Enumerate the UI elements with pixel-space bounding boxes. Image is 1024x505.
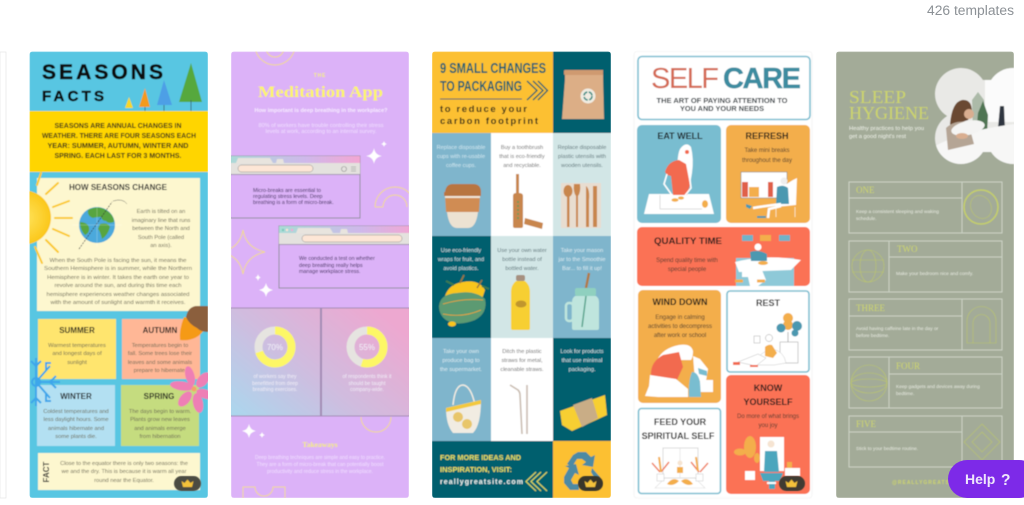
step two	[849, 241, 1002, 292]
icon: premium crown badge	[174, 476, 201, 491]
footer cta	[432, 441, 553, 498]
subtitle	[849, 126, 924, 140]
summer card: and longest days of	[52, 351, 102, 357]
icon: bamboo toothbrush	[513, 174, 543, 229]
step five: Stick to your bedtime routine.	[856, 446, 918, 452]
tile row one: coffee cups.	[446, 163, 476, 169]
self care title: YOU AND YOUR NEEDS	[680, 106, 764, 113]
stats band	[225, 308, 415, 416]
tile row three: packaging.	[568, 367, 596, 373]
intro band	[30, 111, 208, 172]
help button	[948, 460, 1024, 498]
tile row one: cups with re-usable	[437, 154, 485, 160]
help button: ?	[1001, 472, 1010, 489]
quality time card: special people	[668, 267, 707, 273]
takeaways: Takeaways	[302, 440, 338, 449]
icon: reusable cup	[444, 184, 481, 228]
rest card: REST	[756, 298, 780, 308]
summer card: sunlight	[67, 360, 87, 366]
spring card: SPRING	[144, 392, 174, 401]
fact box	[38, 453, 200, 490]
tile row two: Use your own water	[497, 248, 547, 254]
winter card: less daylight hours. Some	[43, 417, 109, 423]
tile row three: Look for products	[560, 349, 604, 355]
lower arc	[361, 417, 391, 432]
fact box: Close to the equator there is only two seasons: the	[60, 461, 188, 467]
spring card: and animals emerge	[134, 426, 186, 432]
meditation heading	[254, 73, 388, 135]
panel: seasons facts	[30, 52, 208, 498]
icon: wrapped fruit	[439, 275, 489, 326]
tile row three: the supermarket.	[440, 367, 482, 373]
tile row two: Use eco-friendly	[441, 248, 481, 254]
tile row three: cleanable straws.	[500, 367, 544, 373]
browser window one	[225, 156, 360, 218]
packaging header: TO PACKAGING	[440, 79, 522, 95]
know yourself card: KNOW	[754, 383, 783, 393]
takeaways: Deep breathing techniques are simple and easy to practice.	[255, 455, 385, 461]
feed your spiritual self card: SPIRITUAL SELF	[642, 431, 715, 441]
how seasons change box: Southern Hemisphere is in summer, while the Northern	[44, 266, 192, 272]
how seasons change box: revolve around the sun, and during this time each	[54, 283, 182, 289]
rest card	[727, 291, 809, 372]
sleep hygiene title: HYGIENE	[849, 103, 929, 123]
tile row two	[432, 236, 611, 338]
subtitle: Healthy practices to help you	[849, 126, 924, 132]
subtitle: get a good night's rest	[849, 134, 907, 140]
eat well card	[637, 125, 721, 223]
stat captions: of workers say they	[253, 374, 297, 380]
template count: 426 templates	[927, 3, 1014, 18]
recycle tile	[553, 441, 611, 498]
browser window two: manage workplace stress.	[299, 269, 361, 275]
icon: premium crown badge	[779, 476, 805, 491]
stat captions: breathing exercises.	[253, 387, 297, 393]
self care title	[638, 56, 810, 120]
know yourself card: Do more of what brings	[737, 414, 799, 420]
panel: packaging	[432, 52, 611, 498]
autumn card: prepare to hibernate.	[134, 368, 187, 374]
panel: self care	[634, 52, 812, 498]
sleep hygiene title: SLEEP	[849, 87, 906, 107]
fact box: we and the dry. This is because it is warm all year	[61, 469, 187, 475]
intro band: SPRING. EACH LAST FOR 3 MONTHS.	[54, 151, 182, 160]
spring card	[121, 385, 199, 446]
icon: yellow bottle	[511, 275, 530, 330]
how seasons change box: Earth is tilted on an	[137, 209, 185, 215]
tile row one: and recyclable.	[503, 163, 541, 169]
how seasons change box: HOW SEASONS CHANGE	[69, 182, 167, 192]
feed your spiritual self card	[638, 408, 720, 494]
takeaways: They are a form of micro-break that can potentially boost	[256, 462, 384, 468]
help button: Help	[965, 471, 995, 487]
winter card: Coldest temperatures and	[43, 409, 109, 415]
meditation heading: THE	[314, 73, 326, 79]
summer card	[38, 319, 116, 379]
tile row three: straws for metal,	[501, 358, 543, 364]
footer cta: FOR MORE IDEAS AND	[440, 453, 522, 462]
step three: Avoid having caffeine late in the day or	[856, 326, 939, 332]
know yourself card: you joy	[758, 423, 778, 429]
wind down card: WIND DOWN	[652, 297, 708, 307]
step five: FIVE	[856, 419, 877, 429]
self care title: SELF	[651, 63, 719, 95]
donut chart 70%	[258, 330, 292, 364]
handle: @REALLYGREATSITE	[892, 480, 961, 486]
step four: bedtime.	[896, 391, 914, 397]
tile row one	[432, 133, 611, 236]
refresh card	[726, 125, 810, 223]
footer cta: reallygreatsite.com	[440, 479, 523, 486]
know yourself card	[726, 375, 810, 494]
step five	[849, 416, 1002, 467]
icon: soap bar	[560, 395, 607, 431]
tile row two: bottle instead of	[502, 257, 542, 263]
browser window two: deep breathing really helps	[299, 263, 363, 269]
photo: woman in bed	[930, 60, 1020, 170]
packaging header	[432, 52, 553, 134]
how seasons change box: South Pole (called	[138, 235, 184, 241]
tile row two: bottled water.	[505, 266, 539, 272]
stat captions: company-wide.	[350, 387, 384, 393]
wind down card	[638, 290, 721, 403]
self care title: CARE	[723, 63, 801, 95]
previous card edge	[0, 52, 6, 498]
donut chart 70%: 70%	[267, 343, 283, 352]
winter card	[37, 385, 115, 446]
tile row three: that use minimal	[562, 358, 602, 364]
meditation heading: How important is deep breathing in the workplace?	[254, 108, 388, 114]
fact box: round near the Equator.	[94, 478, 154, 484]
icon: wooden utensils	[561, 183, 601, 228]
step one: schedule.	[856, 216, 877, 222]
tile row one: Replace disposable	[437, 145, 485, 151]
step four: Keep gadgets and devices away during	[896, 384, 980, 390]
feed your spiritual self card: FEED YOUR	[654, 417, 707, 427]
winter card: WINTER	[60, 392, 92, 401]
decorative rings	[255, 52, 295, 66]
packaging header: carbon footprint	[440, 116, 539, 127]
refresh card: REFRESH	[745, 131, 789, 141]
tile row two: Take your mason	[561, 248, 603, 254]
autumn card: leaves and some animals	[128, 360, 192, 366]
icon: mason jar	[566, 273, 599, 330]
how seasons change box: between the North and	[132, 226, 190, 232]
takeaways	[255, 440, 385, 475]
icon: trees	[125, 63, 202, 111]
refresh card: throughout the day	[742, 158, 792, 164]
step two: Make your bedroom nice and comfy.	[896, 271, 973, 277]
fact box: FACT	[42, 461, 51, 482]
step one: Keep a consistent sleeping and waking	[856, 209, 939, 215]
panel: meditation app	[231, 52, 409, 498]
tile row three	[432, 338, 611, 441]
intro band: YEAR: SUMMER, AUTUMN, WINTER AND	[48, 141, 189, 150]
takeaways: productivity and reduce stress in the workplace.	[267, 469, 373, 475]
step three	[849, 299, 1002, 350]
how seasons change box: When the South Pole is facing the sun, it means the	[50, 258, 186, 264]
bottom u-shape	[243, 487, 285, 500]
browser window one: regulating stress levels. Deep	[253, 194, 323, 200]
tile row two: avoid plastics.	[443, 266, 479, 272]
sparkles middle	[255, 274, 273, 297]
browser window one: breathing is a form of micro-break.	[253, 200, 334, 206]
how seasons change box: imaginary line that runs	[132, 218, 191, 224]
stat captions: benefitted from deep	[252, 381, 298, 387]
tile row one: wooden utensils.	[560, 163, 603, 169]
tile row three: Take your own	[443, 349, 479, 355]
how seasons change box: hemisphere experiences weather changes associated	[46, 292, 190, 298]
spring card: from hibernation	[139, 434, 181, 440]
autumn card: fall. Some trees lose their	[128, 351, 192, 357]
donut chart 55%: 55%	[359, 343, 375, 352]
winter card: animals hibernate and	[48, 426, 104, 432]
tile row one: Buy a toothbrush	[501, 145, 543, 151]
step four: FOUR	[896, 361, 920, 371]
browser window two	[279, 226, 415, 288]
paper bag tile	[553, 52, 611, 134]
wind down card: Engage in calming	[655, 315, 705, 321]
how seasons change box	[37, 178, 200, 311]
icon: acorn	[180, 306, 208, 340]
meditation heading: Meditation App	[258, 84, 383, 101]
step one	[849, 182, 1002, 233]
icon: sun	[30, 171, 74, 264]
stat captions: should be taught	[349, 381, 386, 387]
tile row one: Replace disposable	[558, 145, 606, 151]
tile row one: that is eco-friendly	[499, 154, 545, 160]
browser window one: Micro-breaks are essential to	[253, 188, 321, 194]
tile row two: Bar... to fill it up!	[562, 266, 602, 272]
icon: premium crown badge	[578, 476, 603, 491]
step three: before bedtime.	[856, 333, 889, 339]
autumn card: AUTUMN	[143, 326, 178, 335]
how seasons change box: an axis).	[150, 243, 172, 249]
packaging header: 9 SMALL CHANGES	[440, 61, 546, 77]
tile row two: wraps for fruit, and	[437, 257, 484, 263]
eat well card: EAT WELL	[657, 131, 703, 141]
stat captions: of respondents think it	[343, 374, 392, 380]
packaging header: to reduce your	[440, 104, 527, 115]
quality time card: QUALITY TIME	[654, 236, 722, 246]
donut chart 55%	[350, 330, 384, 364]
wind down card: after work or school	[654, 333, 706, 339]
know yourself card: YOURSELF	[743, 397, 793, 407]
tile row three: produce bag to	[442, 358, 480, 364]
meditation heading: levels at work, according to an internal survey.	[266, 129, 376, 135]
seasons title: FACTS	[42, 88, 104, 105]
wind down card: activities to decompress	[648, 324, 712, 330]
sparkles upper	[366, 141, 387, 164]
icon: straws	[510, 385, 527, 434]
spring card: Plants grow new leaves	[130, 417, 190, 423]
sparkles lower	[242, 424, 265, 438]
tile row one: plastic utensils with	[558, 154, 606, 160]
how seasons change box: with the amount of sunlight and warmth it receives.	[49, 300, 186, 306]
spring card: The days begin to warm.	[129, 409, 192, 415]
panel: sleep hygiene	[836, 52, 1020, 498]
sleep hygiene title	[849, 87, 929, 123]
step four	[849, 357, 1002, 408]
tile row two: jar to the Smoothie	[558, 257, 605, 263]
step one: ONE	[856, 185, 875, 195]
quality time card: Spend quality time with	[656, 258, 718, 264]
self care title: THE ART OF PAYING ATTENTION TO	[656, 98, 788, 105]
icon: earth	[72, 200, 127, 249]
icon: snowflake	[31, 358, 60, 406]
intro band: WEATHER. THERE ARE FOUR SEASONS EACH	[42, 131, 196, 140]
stat captions	[252, 374, 392, 393]
arch shape	[375, 187, 415, 207]
how seasons change box: Hemisphere is in winter. It takes the earth one year to	[47, 275, 189, 281]
icon: flower	[170, 366, 208, 414]
meditation heading: 80% of workers have trouble controlling their stress	[258, 123, 384, 129]
autumn card: Temperatures begin to	[132, 343, 188, 349]
star outline	[231, 230, 266, 274]
summer card: Warmest temperatures	[48, 343, 106, 349]
summer card: SUMMER	[59, 326, 95, 335]
refresh card: Take mini breaks	[744, 148, 790, 154]
footer cta: INSPIRATION, VISIT:	[440, 465, 512, 474]
seasons title	[42, 64, 163, 102]
step three: THREE	[856, 303, 885, 313]
icon: produce bag	[446, 385, 481, 433]
tile row three: Ditch the plastic	[502, 349, 542, 355]
quality time card	[637, 227, 810, 286]
autumn card	[122, 319, 200, 379]
step two: TWO	[897, 244, 918, 254]
seasons title: SEASONS	[42, 61, 163, 84]
intro band: SEASONS ARE ANNUAL CHANGES IN	[54, 121, 182, 130]
winter card: some plants die.	[55, 434, 97, 440]
browser window two: We conducted a test on whether	[299, 256, 375, 262]
